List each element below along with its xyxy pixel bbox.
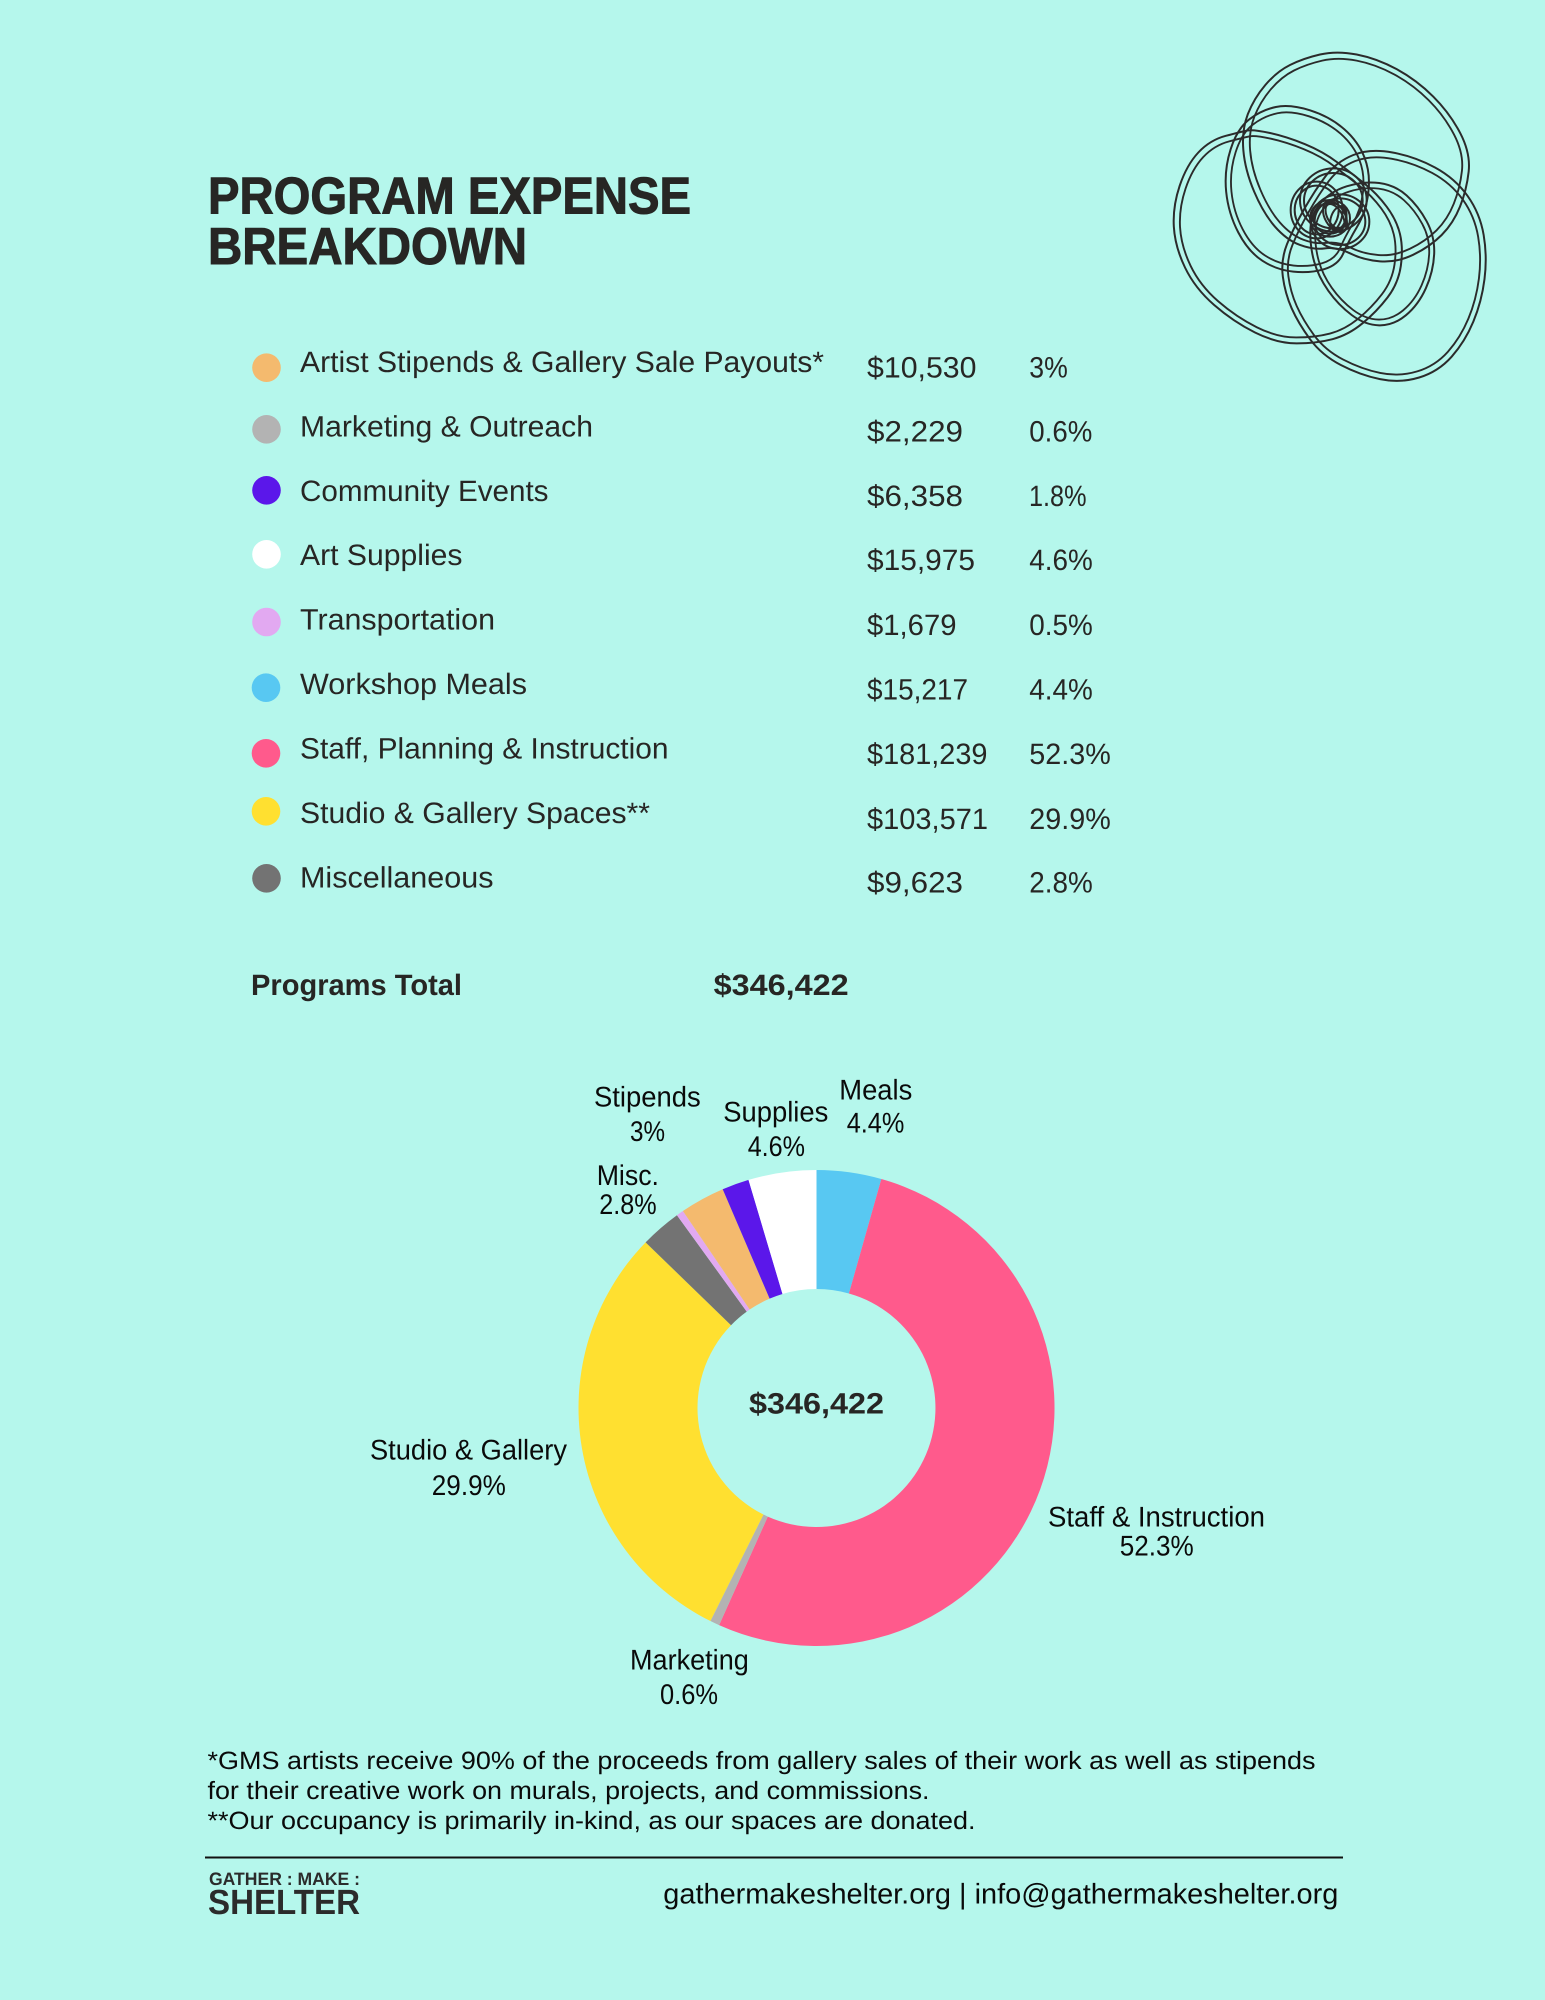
label: supplies: 4.6% [748, 1131, 805, 1163]
label: Marketing & Outreach [300, 410, 593, 444]
amount: $9,623 [867, 866, 963, 899]
percent: 52.3% [1029, 738, 1111, 771]
row: miscellaneous [252, 862, 1093, 899]
label: stipends: 3% [630, 1116, 665, 1148]
logo: SHELTER [208, 1883, 360, 1922]
segment: marketing [710, 1515, 768, 1625]
percent: 0.5% [1029, 609, 1093, 642]
label: supplies [723, 1097, 828, 1163]
label: staff and instruction: 52.3% [1120, 1531, 1194, 1563]
label: misc: 2.8% [599, 1189, 657, 1221]
swatch: pink [252, 739, 280, 768]
swatch: orange [252, 353, 281, 382]
swatch: violet [252, 476, 281, 505]
label: Staff, Planning & Instruction [300, 732, 668, 765]
legend table [252, 346, 1111, 899]
swatch: grey [252, 415, 281, 444]
amount: $103,571 [867, 803, 988, 836]
row: marketing [252, 410, 1092, 449]
swatch: sky blue [252, 673, 280, 702]
label: marketing: 0.6% [660, 1679, 718, 1711]
row: workshop meals [252, 668, 1093, 706]
segment: staff and instruction [719, 1179, 1055, 1646]
percent: 2.8% [1029, 866, 1093, 899]
label: staff and instruction: Staff & Instruction [1048, 1502, 1265, 1534]
swatch: white [252, 540, 281, 569]
percent: 3% [1029, 352, 1068, 385]
programs total: $346,422 [714, 969, 849, 1002]
label: studio and gallery: 29.9% [432, 1470, 506, 1502]
label: Transportation [300, 604, 495, 636]
row: community events [252, 475, 1086, 513]
row: studio [252, 797, 1111, 836]
amount: $181,239 [867, 738, 988, 771]
label: Workshop Meals [300, 668, 527, 701]
donut chart [579, 1170, 1055, 1646]
programs total: Programs Total [251, 969, 462, 1002]
label: marketing: Marketing [630, 1644, 749, 1676]
percent: 29.9% [1029, 803, 1111, 836]
segment: stipends [683, 1189, 770, 1310]
title: BREAKDOWN [208, 218, 527, 276]
title: PROGRAM EXPENSE [208, 168, 691, 226]
swatch: yellow [252, 797, 280, 826]
percent: 0.6% [1029, 416, 1092, 449]
label: misc [597, 1160, 659, 1221]
row: art supplies [252, 539, 1093, 577]
label: staff and instruction [1048, 1502, 1265, 1563]
label: studio and gallery [370, 1434, 568, 1502]
label: misc: Misc. [597, 1160, 659, 1192]
amount: $15,975 [867, 544, 975, 577]
footnotes: **Our occupancy is primarily in-kind, as our spaces are donated. [208, 1807, 975, 1835]
label: marketing [630, 1644, 749, 1711]
footnotes [208, 1747, 1316, 1835]
center total: $346,422 [749, 1388, 884, 1420]
footnotes: *GMS artists receive 90% of the proceeds from gallery sales of their work as well as stipends [208, 1747, 1316, 1775]
segment: miscellaneous [646, 1215, 747, 1325]
label: Artist Stipends & Gallery Sale Payouts* [300, 346, 825, 379]
row: transportation [252, 604, 1093, 642]
label: Community Events [300, 475, 548, 508]
label: meals: 4.4% [847, 1108, 904, 1140]
amount: $15,217 [867, 673, 968, 706]
label: stipends: Stipends [594, 1082, 701, 1114]
title [208, 168, 691, 276]
segment: transportation [677, 1211, 750, 1312]
chart labels [370, 1074, 1265, 1711]
amount: $6,358 [867, 480, 963, 513]
segment: studio and gallery [579, 1242, 763, 1621]
percent: 4.4% [1029, 673, 1093, 706]
programs total [251, 969, 849, 1002]
percent: 1.8% [1029, 480, 1086, 513]
segment: art supplies [748, 1170, 816, 1294]
swatch: lilac [252, 608, 281, 636]
label: Studio & Gallery Spaces** [300, 797, 651, 830]
segment: meals [816, 1170, 881, 1294]
amount: $1,679 [867, 609, 956, 642]
label: meals: Meals [839, 1074, 912, 1106]
row: artist stipends [252, 346, 1068, 385]
amount: $2,229 [867, 416, 963, 449]
percent: 4.6% [1029, 544, 1093, 577]
label: stipends [594, 1082, 701, 1148]
label: Miscellaneous [300, 862, 494, 894]
label: Art Supplies [300, 539, 462, 572]
amount: $10,530 [867, 352, 976, 385]
segment: community events [723, 1180, 782, 1299]
label: studio and gallery: Studio & Gallery [370, 1434, 568, 1466]
icon: scribbled looping circles [1174, 53, 1486, 381]
label: meals [839, 1074, 912, 1140]
row: staff [252, 732, 1111, 771]
swatch: dark grey [252, 864, 281, 893]
logo: GATHER : MAKE : [209, 1869, 360, 1889]
label: supplies: Supplies [723, 1097, 828, 1129]
contact line: gathermakeshelter.org | info@gathermakeshelter.org [663, 1878, 1338, 1910]
footnotes: for their creative work on murals, projects, and commissions. [208, 1777, 929, 1805]
